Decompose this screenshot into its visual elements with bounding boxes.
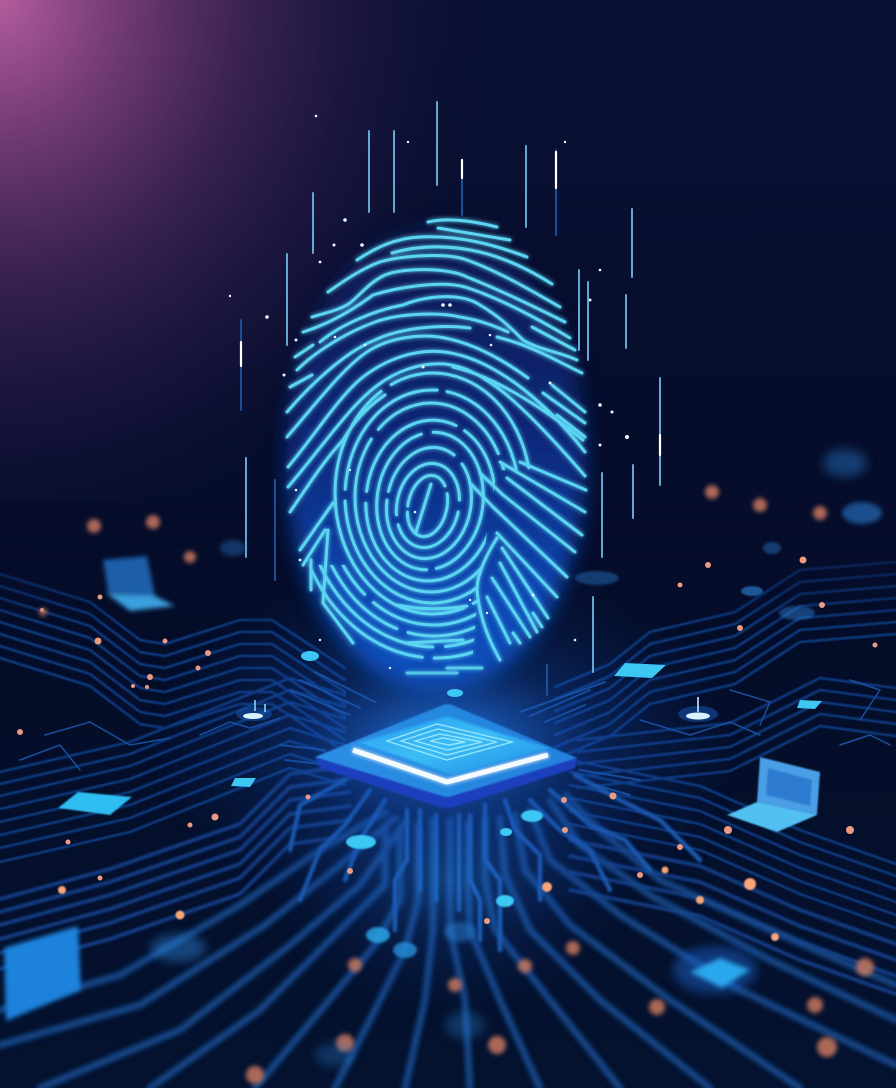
blurred blue board components (150, 449, 882, 1067)
upper arching ridges (357, 237, 527, 260)
horizon fade over far traces (0, 500, 896, 630)
blurred screen panel, lower left (4, 926, 81, 1021)
core whorl ridges (335, 373, 531, 614)
glowing diamond component, lower right (673, 946, 757, 994)
laptop icon, right (727, 757, 820, 832)
fingerprint (287, 220, 586, 673)
central microchip (280, 660, 610, 830)
chip base (315, 704, 577, 797)
chip underside (315, 757, 577, 808)
laptop icon, upper left (103, 556, 175, 611)
chip light glow over the board (145, 555, 745, 1020)
fingerprint halo (286, 228, 586, 692)
pad, left (236, 700, 272, 721)
chip glow (280, 660, 610, 830)
data rain lines (241, 102, 660, 695)
orange node lights (17, 485, 878, 1084)
chip glowing edge (353, 750, 548, 782)
cyan board components (58, 651, 822, 907)
fingerprint particles (229, 115, 629, 669)
right shoulder ridges (497, 337, 582, 373)
chip top face (358, 717, 547, 774)
small holographic pads (236, 697, 718, 722)
lower left ridges (300, 503, 333, 550)
lower outer ridges (308, 562, 478, 662)
bottom ridges (407, 672, 457, 674)
pad, right (678, 697, 718, 722)
top ridge caps (428, 220, 497, 227)
lower right delta ridges (497, 533, 557, 597)
chip engraved maze (387, 724, 512, 760)
circuit board traces (0, 562, 896, 1088)
